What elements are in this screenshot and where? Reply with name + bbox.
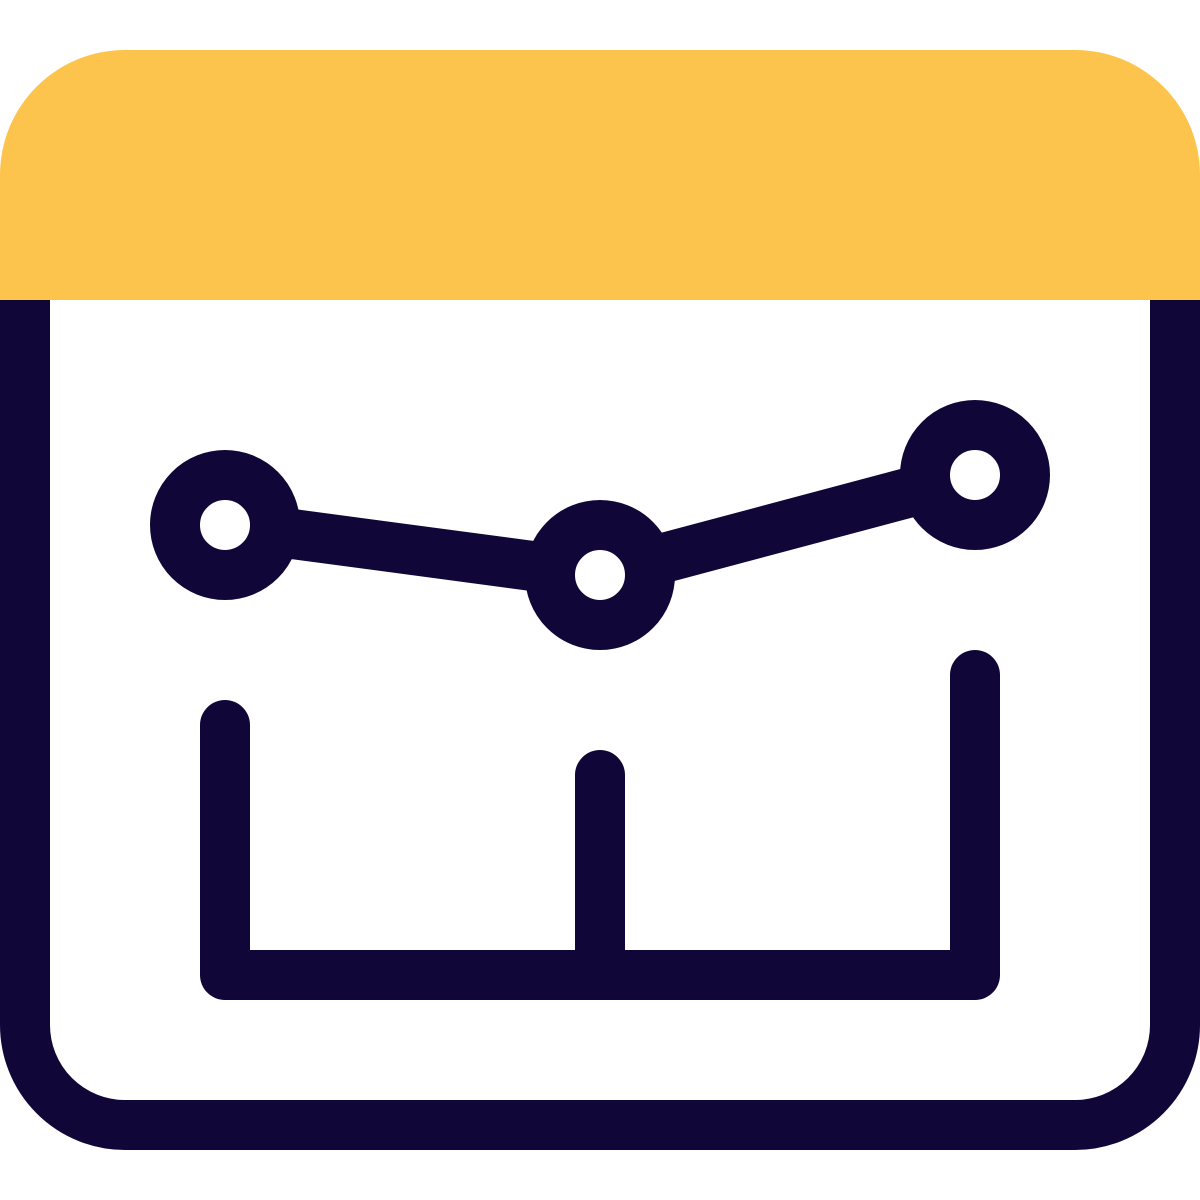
data point middle (550, 525, 650, 625)
data point right (925, 425, 1025, 525)
bar chart axis and outer bars (225, 675, 975, 975)
data point left (175, 475, 275, 575)
window header bar (0, 50, 1200, 300)
window frame (25, 300, 1175, 1125)
line chart connectors (225, 475, 975, 575)
line chart (175, 425, 1025, 625)
bar chart (225, 675, 975, 975)
middle bar (575, 775, 625, 975)
